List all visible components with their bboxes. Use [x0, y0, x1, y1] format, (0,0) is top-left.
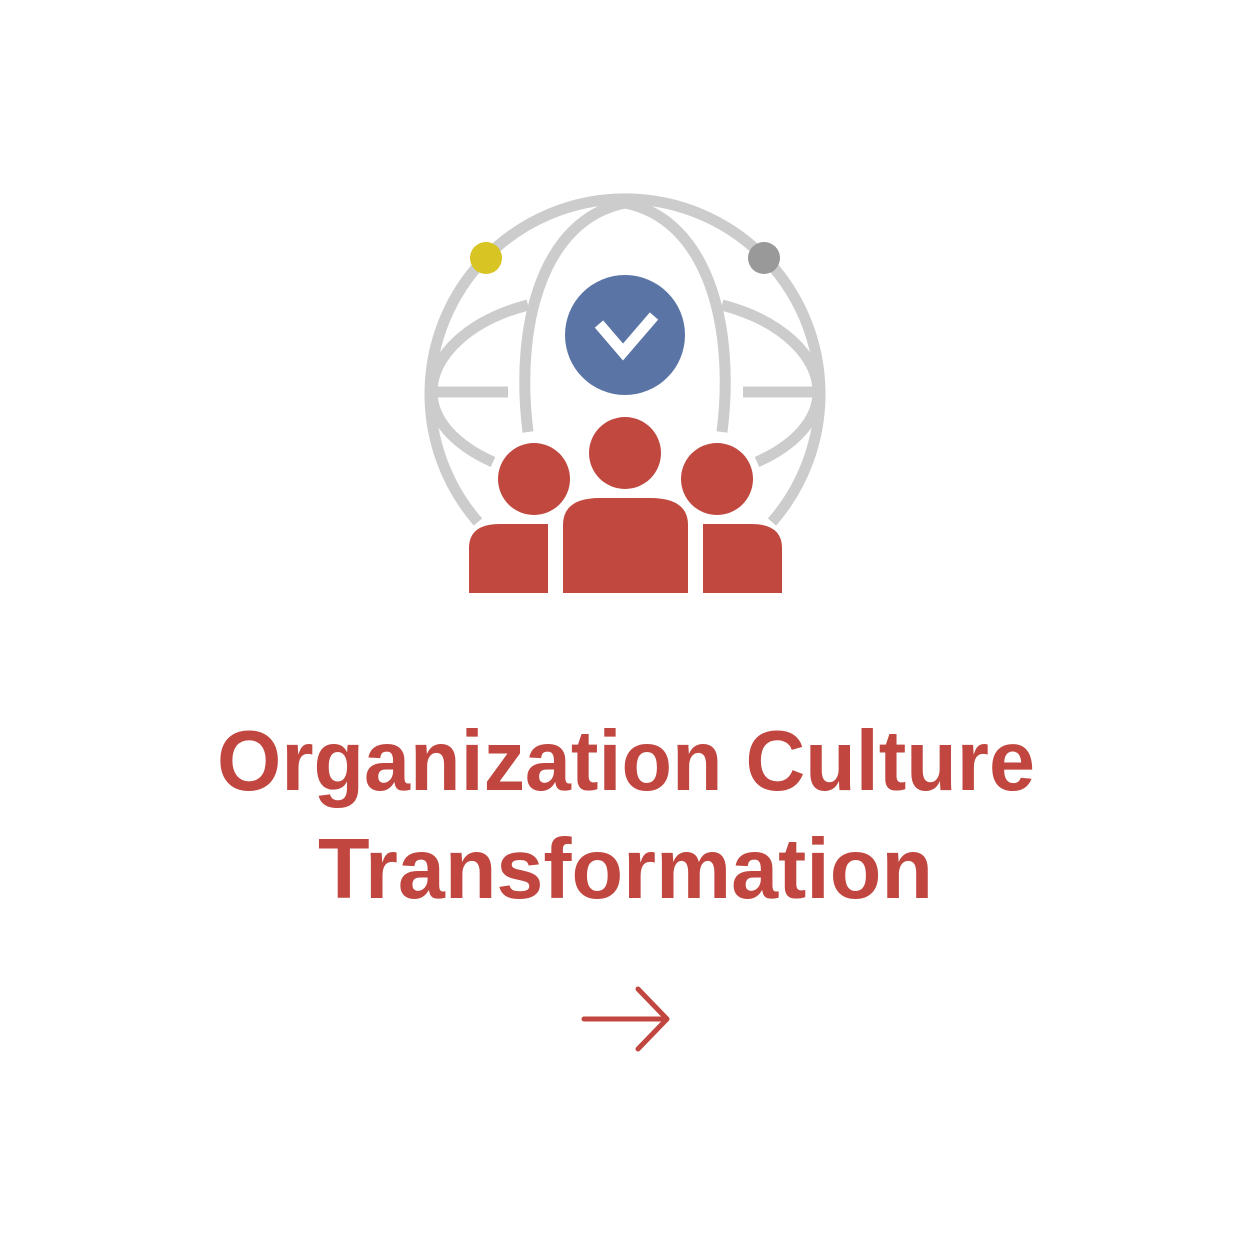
dot: yellow	[470, 242, 502, 274]
title: Organization Culture	[217, 714, 1035, 809]
arrow	[584, 989, 667, 1049]
title	[217, 714, 1035, 917]
icon: check badge	[565, 275, 685, 395]
people group	[469, 417, 782, 593]
globe outline	[430, 199, 820, 522]
icon: globe with people	[430, 199, 820, 593]
title: Transformation	[318, 822, 933, 917]
dot: grey	[748, 242, 780, 274]
